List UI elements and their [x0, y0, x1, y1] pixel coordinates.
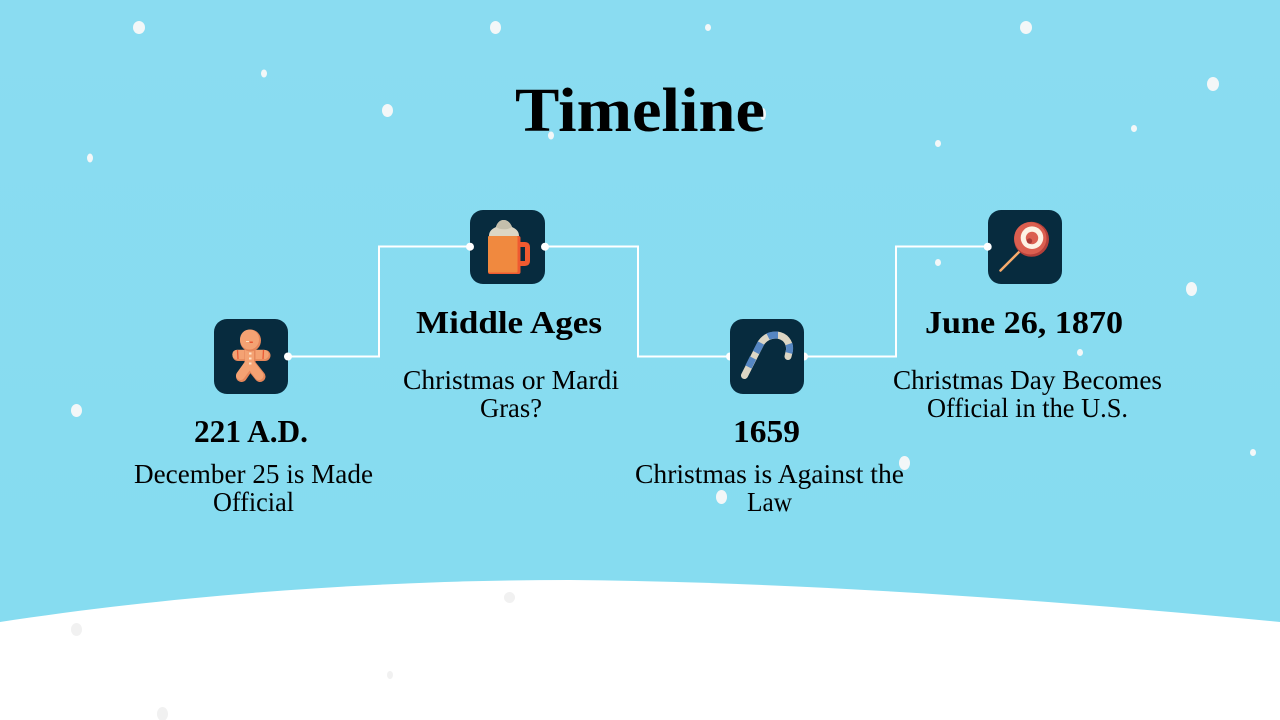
heading: 1659	[733, 413, 800, 449]
milestone: 1659	[635, 319, 904, 517]
connector dots behind candy cane icon	[726, 352, 808, 360]
snow ground	[0, 580, 1280, 720]
description	[134, 459, 373, 517]
timeline connector	[288, 246, 988, 356]
connector dots over icon edges	[284, 243, 992, 360]
description	[893, 365, 1162, 423]
description: Official in the U.S.	[927, 393, 1128, 423]
milestone: Middle Ages	[403, 210, 619, 423]
icon: hot cocoa mug	[470, 210, 545, 284]
description	[635, 459, 904, 517]
description: Christmas Day Becomes	[893, 365, 1162, 395]
milestone: June 26, 1870	[893, 210, 1162, 423]
falling snow	[71, 21, 1256, 504]
title: Timeline	[515, 77, 765, 145]
heading: June 26, 1870	[925, 304, 1123, 340]
description: Christmas or Mardi	[403, 365, 619, 395]
description: Gras?	[480, 393, 542, 423]
description: Law	[747, 487, 792, 517]
icon: candy cane	[730, 319, 804, 394]
description: Christmas is Against the	[635, 459, 904, 489]
snow on ground	[71, 592, 515, 720]
milestone: 221 A.D.	[134, 319, 373, 517]
heading: 221 A.D.	[194, 413, 308, 449]
description: Official	[213, 487, 294, 517]
icon: lollipop	[988, 210, 1062, 284]
description: December 25 is Made	[134, 459, 373, 489]
description	[403, 365, 619, 423]
heading: Middle Ages	[416, 304, 602, 340]
icon: gingerbread man	[214, 319, 288, 394]
